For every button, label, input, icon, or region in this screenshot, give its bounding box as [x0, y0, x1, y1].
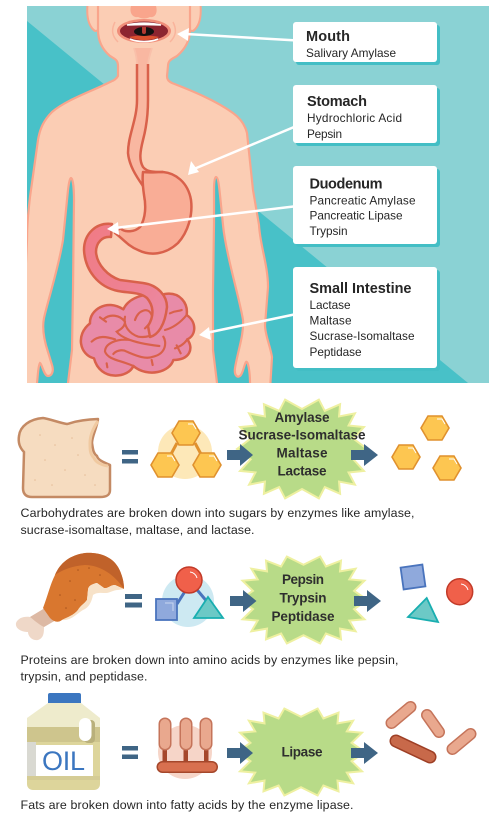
icon: bread slice — [19, 418, 110, 497]
enzyme burst: Lactase — [278, 464, 327, 478]
stomach — [115, 172, 191, 254]
label: small intestine: Lactase — [310, 298, 351, 312]
enzyme burst — [237, 709, 365, 795]
label: duodenum — [293, 166, 440, 247]
text: proteins description: trypsin, and peptidase. — [20, 670, 148, 684]
panel: proteins — [16, 553, 473, 684]
small intestine — [81, 294, 194, 376]
text: proteins description — [20, 653, 398, 684]
icon: sugars — [392, 416, 461, 480]
enzyme burst — [237, 400, 367, 498]
arrow: small intestine — [199, 312, 306, 340]
label: duodenum: Pancreatic Amylase — [310, 194, 416, 208]
arrow — [227, 444, 253, 466]
label: duodenum: Duodenum — [310, 176, 382, 192]
icon: carbohydrate molecule — [151, 421, 221, 479]
label: stomach — [293, 85, 440, 146]
icon: oil bottle — [27, 693, 100, 790]
human body illustration — [20, 0, 272, 390]
label: small intestine: Maltase — [310, 314, 352, 328]
arrow — [227, 742, 253, 764]
duodenum — [84, 224, 167, 337]
icon: fat molecule — [158, 724, 212, 779]
arrow: stomach — [188, 122, 306, 175]
arrow — [351, 742, 378, 764]
equals sign — [122, 450, 138, 464]
label: duodenum: Pancreatic Lipase — [310, 208, 403, 222]
label: stomach: Stomach — [307, 94, 367, 110]
equals sign — [122, 746, 138, 759]
esophagus — [129, 48, 151, 200]
panel background — [27, 6, 489, 383]
arrow — [230, 590, 256, 612]
label: small intestine: Peptidase — [310, 345, 362, 359]
arrow: duodenum — [107, 205, 306, 235]
cheek creases — [113, 22, 175, 42]
text: carbohydrates description: sucrase-isomaltase, maltase, and lactase. — [20, 523, 254, 537]
arrow: mouth — [177, 28, 306, 41]
enzyme burst: Amylase — [274, 410, 330, 425]
enzyme burst: Peptidase — [272, 609, 335, 624]
icon: oil bottle: OIL — [42, 746, 85, 776]
text: carbohydrates description: Carbohydrates are broken down into sugars by enzymes like amylase, — [20, 506, 414, 520]
enzyme burst: Trypsin — [280, 590, 326, 606]
nose — [130, 6, 157, 18]
enzyme burst: Sucrase-Isomaltase — [238, 428, 366, 442]
arrow — [351, 444, 378, 466]
panel: digestive tract anatomy — [20, 0, 489, 390]
text: carbohydrates description — [20, 506, 414, 537]
mouth — [117, 19, 171, 43]
enzyme burst: Pepsin — [282, 572, 324, 587]
panel: fats — [20, 693, 470, 812]
enzyme burst: Maltase — [276, 446, 328, 460]
label: mouth: Mouth — [306, 29, 350, 45]
enzyme burst: Lipase — [282, 744, 323, 760]
label: small intestine: Small Intestine — [310, 281, 412, 297]
icon: protein molecule — [156, 567, 223, 627]
label: small intestine — [293, 267, 440, 371]
label: stomach: Hydrochloric Acid — [307, 111, 402, 125]
icon: chicken leg — [16, 553, 124, 640]
enzyme burst — [240, 557, 368, 643]
label: small intestine: Sucrase-Isomaltase — [310, 329, 415, 343]
icon: fatty acids — [392, 707, 470, 757]
label: duodenum: Trypsin — [310, 224, 348, 238]
label: mouth: Salivary Amylase — [306, 46, 396, 60]
text: fats description: Fats are broken down into fatty acids by the enzyme lipase. — [20, 798, 354, 812]
equals sign — [125, 594, 142, 608]
text: proteins description: Proteins are broken down into amino acids by enzymes like pepsin, — [20, 653, 398, 667]
arrow — [354, 590, 381, 612]
panel: carbohydrates — [19, 400, 461, 537]
label: mouth — [293, 22, 440, 65]
icon: amino acids — [401, 565, 473, 622]
label: stomach: Pepsin — [307, 127, 342, 141]
